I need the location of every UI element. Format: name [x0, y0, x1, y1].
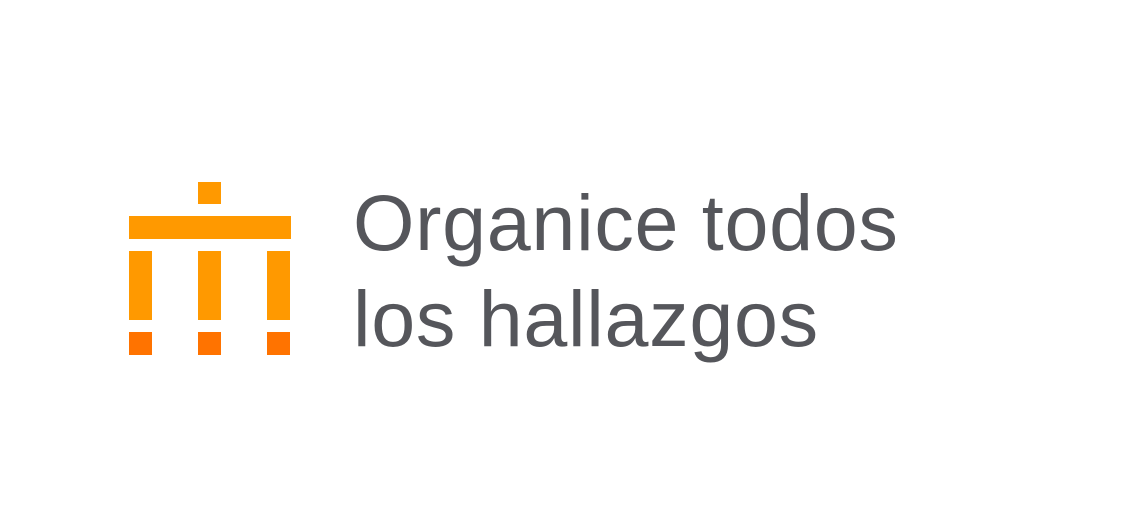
- icon: organize columns: [129, 182, 291, 355]
- title: los hallazgos: [353, 274, 819, 363]
- title: [353, 178, 899, 363]
- title: Organice todos: [353, 178, 899, 267]
